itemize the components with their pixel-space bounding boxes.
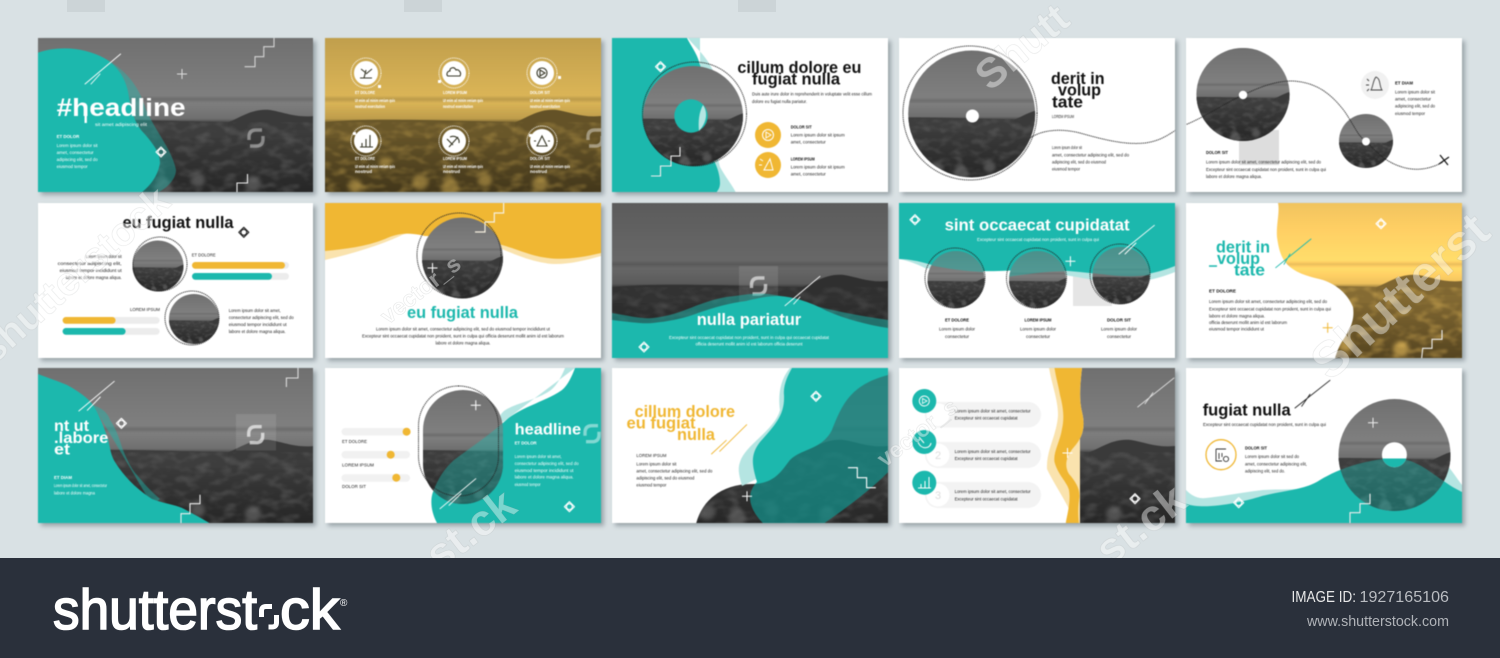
panel: slide 13 teal and photo blobs: Lorem ipsum dolor sit: [636, 462, 677, 466]
panel: slide 6 progress bars and two circles: eiusmod tempor incididunt ut: [60, 268, 122, 273]
panel: slide 6 progress bars and two circles: ET DOLORE: [192, 252, 216, 258]
panel: slide 4 big circle with wave: eiusmod tempor: [1052, 166, 1080, 172]
panel: slide 8 photo with teal wave: officia deserunt mollit anim id est laborum officia deserunt: [696, 342, 803, 346]
list item 3: Lorem ipsum dolor sit amet, consectetur: [955, 489, 1031, 494]
panel: slide 1 headline cover: amet, consectetur: [57, 150, 94, 155]
panel: slide 10 yellow photo with teal title: eiusmod tempor incididunt ut: [1209, 326, 1265, 332]
panel: slide 3 circle with two yellow icons: DOLOR SIT: [791, 124, 812, 130]
panel: slide 10 yellow photo with teal title: labore et dolore magna aliqua.: [1209, 314, 1265, 318]
panel: slide 6 progress bars and two circles: consectetur adipiscing elit,: [58, 261, 122, 266]
panel: slide 15 donut photo with teal wave: Lorem ipsum dolor sit sed do: [1245, 454, 1299, 459]
title: #headline: [57, 94, 186, 122]
panel: slide 8 photo with teal wave: Excepteur sint occaecat cupidatat non proident, sunt in culpa qui occaecat cupidatat: [669, 335, 830, 340]
icon: yellow ring: [1206, 440, 1236, 470]
panel: slide 11 teal side wave on photo: labore et dolore magna: [54, 490, 95, 496]
panel: slide 2 six icons on yellow photo: [325, 38, 602, 197]
list item 3: Excepteur sint occaecat cupidatat: [955, 496, 1018, 501]
shutterstock logo: shutterst: [53, 578, 257, 642]
panel: slide 1 headline cover: adipiscing elit, sed do: [57, 157, 98, 162]
panel: slide 1 headline cover: [37, 37, 314, 197]
title: nulla pariatur: [697, 310, 802, 329]
panel: slide 2 six icons on yellow photo: Ut enim ad minim veniam quis: [355, 98, 395, 103]
panel: slide 2 six icons on yellow photo: nostrud exercitation: [530, 104, 560, 109]
title: eu fugiat: [626, 415, 696, 433]
panel: slide 12 pill image with sliders: LOREM IPSUM: [342, 462, 374, 468]
title: volup: [1217, 249, 1260, 268]
panel: slide 9 three circles on teal header: Lorem ipsum dolor: [939, 326, 975, 332]
panel: slide 6 progress bars and two circles: labore et dolore magna aliqua.: [229, 329, 286, 334]
panel: slide 2 six icons on yellow photo: DOLOR SIT: [530, 90, 550, 95]
panel: slide 6 progress bars and two circles: eiusmod tempor incididunt ut: [229, 322, 287, 327]
stock watermarks: vector_s: [872, 393, 963, 472]
panel: slide 5 two circles on dotted path: DOLOR SIT: [1206, 150, 1228, 155]
shutterstock logo: ck: [280, 578, 340, 642]
panel: slide 4 big circle with wave: amet, consectetur adipiscing elit, sed do: [1052, 152, 1129, 158]
panel: slide 2 six icons on yellow photo: nostrud exercitation: [443, 104, 473, 109]
panel: slide 11 teal side wave on photo: ET DIAM: [54, 475, 72, 480]
stock watermarks: vector_s: [375, 250, 466, 329]
panel: slide 4 big circle with wave: LOREM IPSUM: [1052, 114, 1074, 119]
title: cillum dolore: [635, 403, 735, 421]
panel: slide 2 six icons on yellow photo: Ut enim ad minim veniam quis: [530, 98, 570, 103]
panel: slide 10 yellow photo with teal title: Excepteur sint occaecat cupidatat non proident, sunt in culpa qui: [1209, 306, 1331, 312]
panel: slide 2 six icons on yellow photo: nostrud: [443, 169, 460, 174]
panel: slide 2 six icons on yellow photo: LOREM IPSUM: [443, 156, 467, 161]
title: [626, 403, 735, 444]
panel: slide 2 six icons on yellow photo: Ut enim ad minim veniam quis: [443, 164, 483, 169]
list item 2: 2: [935, 450, 941, 462]
panel: slide 9 three circles on teal header: ET DOLORE: [945, 318, 969, 322]
title: [737, 58, 861, 88]
panel: slide 4 big circle with wave: [898, 38, 1176, 192]
panel: slide 1 headline cover: eiusmod tempor: [57, 164, 88, 169]
panel: slide 2 six icons on yellow photo: nostrud: [530, 169, 547, 174]
panel: slide 5 two circles on dotted path: Lorem ipsum dolor sit: [1395, 90, 1436, 94]
panel: slide 3 circle with two yellow icons: [604, 37, 888, 193]
icon: yellow circle 2: [755, 152, 781, 178]
panel: slide 5 two circles on dotted path: amet, consectetur: [1395, 96, 1431, 102]
panel: slide 15 donut photo with teal wave: [1186, 368, 1494, 523]
panel: slide 2 six icons on yellow photo: ET DOLORE: [355, 156, 375, 161]
panel: slide 9 three circles on teal header: Lorem ipsum dolor: [1020, 326, 1056, 332]
list item 1: Lorem ipsum dolor sit amet, consectetur: [955, 408, 1031, 414]
title: tate: [1234, 261, 1265, 280]
list item 1: Excepteur sint occaecat cupidatat: [955, 416, 1018, 420]
stock watermarks: Shutterst: [1300, 201, 1500, 390]
panel: slide 9 three circles on teal header: consectetur: [945, 334, 969, 339]
panel: slide 13 teal and photo blobs: [612, 368, 888, 527]
title: headline: [515, 422, 581, 439]
panel: slide 9 three circles on teal header: [899, 203, 1175, 358]
title: sint occaecat cupidatat: [945, 216, 1130, 235]
title: eu fugiat nulla: [407, 303, 519, 322]
panel: slide 5 two circles on dotted path: Excepteur sint occaecat cupidatat non proident, sunt in culpa qui: [1206, 167, 1326, 172]
panel: slide 12 pill image with sliders: Lorem ipsum dolor sit amet,: [515, 454, 562, 459]
panel: slide 12 pill image with sliders: [325, 368, 601, 523]
panel: slide 15 donut photo with teal wave: DOLOR SIT: [1245, 446, 1267, 450]
panel: slide 7 yellow wave and circle: labore et dolore magna aliqua.: [436, 340, 490, 346]
list item 2: Excepteur sint occaecat cupidatat: [955, 456, 1018, 461]
panel: slide 2 six icons on yellow photo: Ut enim ad minim veniam quis: [443, 98, 483, 103]
panel: slide 4 big circle with wave: Lorem ipsum dolor sit: [1052, 145, 1082, 150]
shutterstock logo: ®: [340, 598, 348, 609]
panel: slide 13 teal and photo blobs: amet, consectetur adipiscing elit, sed do: [636, 468, 713, 474]
panel: slide 15 donut photo with teal wave: adipiscing elit, sed do.: [1245, 468, 1285, 474]
icon: bell in grey circle: [1361, 71, 1389, 99]
title: cillum dolore eu: [737, 58, 861, 77]
panel: slide 1 headline cover: sit amet adipiscing elit: [95, 122, 148, 127]
panel: slide 12 pill image with sliders: labore et dolore magna aliqua.: [515, 475, 574, 480]
bar chart: top bars: [192, 262, 289, 280]
panel: slide 12 pill image with sliders: eiusmod tempor: [515, 482, 541, 487]
panel: slide 15 donut photo with teal wave: amet, consectetur adipiscing elit,: [1245, 462, 1307, 466]
panel: slide 15 donut photo with teal wave: Excepteur sint occaecat cupidatat non proident, sunt in culpa qui: [1203, 422, 1326, 427]
title: volup: [1058, 81, 1101, 100]
panel: slide 9 three circles on teal header: DOLOR SIT: [1107, 318, 1131, 322]
panel: slide 2 six icons on yellow photo: ET DOLORE: [355, 90, 375, 95]
panel: slide 7 yellow wave and circle: Excepteur sint occaecat cupidatat non proident, sunt in culpa qui officia deserunt mollit anim id est laborum: [362, 334, 564, 338]
title: fugiat nulla: [752, 70, 841, 88]
panel: slide 6 progress bars and two circles: LOREM IPSUM: [130, 307, 160, 312]
panel: slide 9 three circles on teal header: consectetur: [1107, 334, 1131, 339]
list item 2: [912, 430, 1041, 468]
grid of presentation slides: [37, 37, 1494, 527]
title: tate: [1052, 92, 1083, 111]
panel: slide 14 numbered list with photo: [899, 368, 1175, 527]
title: .labore: [54, 430, 109, 447]
panel: slide 5 two circles on dotted path: adipiscing elit, sed do: [1395, 104, 1435, 108]
panel: slide 6 progress bars and two circles: [38, 203, 313, 358]
panel: slide 10 yellow photo with teal title: [1186, 203, 1462, 362]
title: [1208, 240, 1270, 276]
panel: slide 9 three circles on teal header: LOREM IPSUM: [1024, 318, 1052, 322]
image id: IMAGE ID:: [1292, 589, 1356, 606]
panel: slide 2 six icons on yellow photo: LOREM IPSUM: [443, 90, 467, 95]
panel: slide 2 six icons on yellow photo: Ut enim ad minim veniam quis: [355, 164, 395, 169]
image id: 1927165106: [1360, 589, 1449, 606]
list item 3: [912, 471, 1041, 508]
panel: slide 3 circle with two yellow icons: Duis aute irure dolor in reprehenderit in voluptate velit esse cillum: [752, 92, 872, 96]
panel: slide 7 yellow wave and circle: [325, 203, 601, 358]
panel: slide 7 yellow wave and circle: Lorem ipsum dolor sit amet, consectetur adipiscing elit, sed do eiusmod tempor incididunt ut: [376, 326, 551, 332]
panel: slide 6 progress bars and two circles: Lorem ipsum dolor sit amet,: [229, 308, 281, 313]
title: [54, 420, 108, 456]
image id: www.shutterstock.com: [1306, 614, 1449, 630]
title: fugiat nulla: [1203, 400, 1291, 419]
panel: slide 8 photo with teal wave: [612, 203, 888, 362]
panel: slide 12 pill image with sliders: eiusmod tempor incididunt ut: [515, 468, 574, 473]
sliders chart: [342, 428, 411, 482]
title: nt ut: [54, 418, 89, 435]
slide shadows: [41, 41, 1465, 526]
icon group: six circle icons: [351, 58, 561, 156]
panel: slide 6 progress bars and two circles: consectetur adipiscing elit, sed do: [229, 315, 294, 320]
panel: slide 2 six icons on yellow photo: DOLOR SIT: [530, 156, 550, 161]
stock watermarks: st.ck: [416, 479, 526, 580]
panel: slide 11 teal side wave on photo: [37, 368, 314, 527]
panel: slide 12 pill image with sliders: ET DOLOR: [515, 440, 537, 446]
title: nulla: [677, 426, 716, 444]
title: derit in: [1051, 69, 1104, 88]
panel: slide 2 six icons on yellow photo: Ut enim ad minim veniam quis: [530, 164, 570, 169]
panel: slide 10 yellow photo with teal title: Lorem ipsum dolor sit amet, consectetur adipiscing elit, sed do: [1209, 299, 1327, 304]
panel: slide 13 teal and photo blobs: eiusmod tempor: [636, 482, 667, 488]
panel: slide 5 two circles on dotted path: Lorem ipsum dolor sit amet, consectetur adipiscing elit, sed do: [1206, 160, 1321, 164]
panel: slide 5 two circles on dotted path: labore et dolore magna aliqua.: [1206, 174, 1262, 179]
panel: slide 12 pill image with sliders: consectetur adipiscing elit, sed do: [515, 461, 579, 466]
title: et: [54, 442, 70, 459]
panel: slide 5 two circles on dotted path: eiusmod tempor: [1395, 111, 1425, 116]
panel: slide 13 teal and photo blobs: adipiscing elit, sed do eiusmod: [636, 476, 695, 480]
panel: slide 3 circle with two yellow icons: Lorem ipsum dolor sit ipsum: [791, 132, 845, 138]
panel: slide 3 circle with two yellow icons: amet, consectetur: [791, 140, 826, 144]
icon: yellow circle 1: [755, 122, 781, 148]
panel: slide 6 progress bars and two circles: labore et dolore magna aliqua.: [66, 275, 122, 280]
panel: slide 11 teal side wave on photo: Lorem ipsum dolor sit amet, consectetur: [54, 483, 107, 488]
bar chart: bottom bars: [63, 317, 160, 335]
panel: slide 5 two circles on dotted path: [1160, 38, 1462, 192]
panel: slide 10 yellow photo with teal title: officia deserunt mollit anim id est laborum: [1209, 320, 1287, 325]
panel: slide 1 headline cover: Lorem ipsum dolor sit: [57, 143, 98, 148]
list item 1: [912, 389, 1041, 428]
panel: slide 2 six icons on yellow photo: nostrud: [355, 169, 372, 174]
panel: slide 10 yellow photo with teal title: ET DOLORE: [1209, 288, 1236, 294]
panel: slide 4 big circle with wave: adipiscing elit, sed do eiusmod: [1052, 160, 1106, 164]
panel: slide 9 three circles on teal header: Excepteur sint occaecat cupidatat non proident, sunt in culpa qui: [977, 237, 1099, 242]
panel: slide 1 headline cover: ET DOLOR: [57, 134, 80, 139]
image id: [1292, 589, 1449, 630]
title: eu fugiat nulla: [122, 213, 234, 232]
panel: slide 6 progress bars and two circles: Lorem ipsum dolor sit: [86, 254, 122, 259]
title: [1050, 71, 1104, 108]
panel: slide 12 pill image with sliders: ET DOLORE: [342, 439, 367, 444]
footer bar: [0, 558, 1500, 658]
list item 2: Lorem ipsum dolor sit amet, consectetur: [955, 449, 1031, 454]
panel: slide 2 six icons on yellow photo: nostrud exercitation: [355, 104, 385, 109]
panel: slide 13 teal and photo blobs: LOREM IPSUM: [636, 453, 667, 458]
panel: slide 3 circle with two yellow icons: LOREM IPSUM: [791, 156, 815, 162]
panel: slide 5 two circles on dotted path: ET DIAM: [1395, 80, 1413, 86]
panel: slide 9 three circles on teal header: Lorem ipsum dolor: [1101, 326, 1137, 332]
list item 3: 3: [935, 490, 941, 502]
stock watermarks: st.ck: [1086, 474, 1196, 575]
title: derit in: [1216, 238, 1270, 257]
panel: slide 3 circle with two yellow icons: amet, consectetur: [791, 172, 826, 176]
panel: slide 9 three circles on teal header: consectetur: [1026, 334, 1050, 339]
panel: slide 3 circle with two yellow icons: dolore eu fugiat nulla pariatur.: [752, 99, 807, 104]
panel: slide 12 pill image with sliders: DOLOR SIT: [342, 484, 366, 489]
panel: slide 3 circle with two yellow icons: Lorem ipsum dolor sit ipsum: [791, 164, 845, 170]
